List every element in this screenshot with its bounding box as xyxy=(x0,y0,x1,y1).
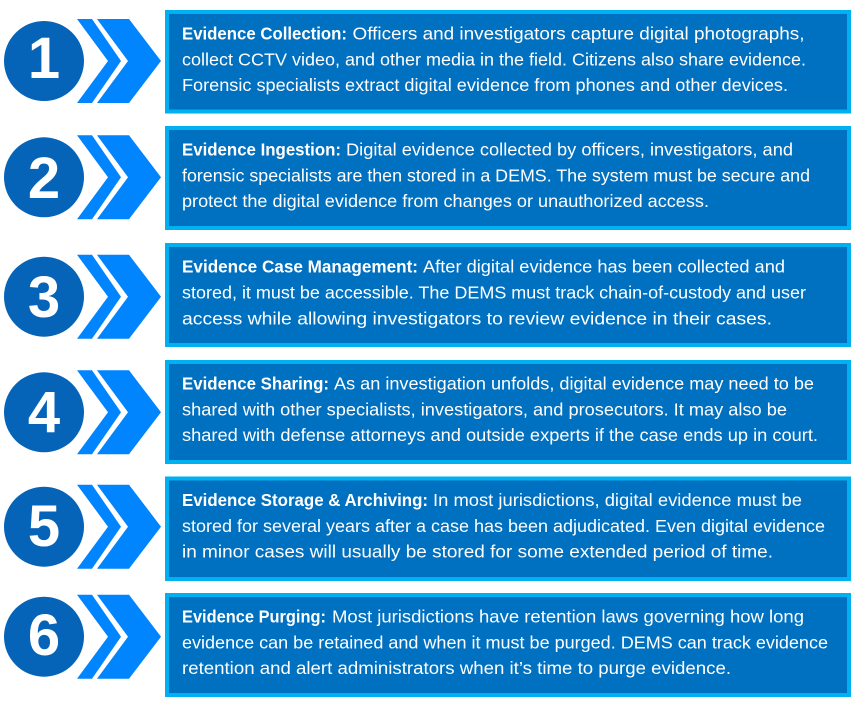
panel: evidence purging xyxy=(167,595,849,695)
number badge 6 xyxy=(4,597,84,677)
panel: evidence storage and archiving: in minor cases will usually be stored for some extended period of time. xyxy=(182,542,773,562)
chevron arrow 1 xyxy=(77,19,161,103)
number badge 2 xyxy=(4,137,84,217)
panel: evidence sharing: shared with other specialists, investigators, and prosecutors. It may also be xyxy=(182,399,787,419)
panel: evidence sharing: shared with defense attorneys and outside experts if the case ends up in court. xyxy=(182,425,818,445)
panel: evidence collection: Evidence Collection: xyxy=(182,23,347,43)
panel: evidence case management: access while allowing investigators to review evidence in their cases. xyxy=(182,308,772,328)
number badge 3: 3 xyxy=(28,265,60,330)
panel: evidence collection xyxy=(167,12,849,112)
step 1 row xyxy=(4,12,849,112)
step 4 row xyxy=(4,362,849,462)
panel: evidence storage and archiving: Evidence Storage & Archiving: xyxy=(182,490,428,510)
panel: evidence purging: evidence can be retained and when it must be purged. DEMS can track evidence xyxy=(182,632,828,652)
chevron arrow 4 xyxy=(77,370,161,454)
chevron arrow 2 xyxy=(77,135,161,219)
panel: evidence case management xyxy=(167,245,849,345)
panel: evidence case management: After digital evidence has been collected and xyxy=(423,256,785,276)
panel: evidence ingestion: Digital evidence collected by officers, investigators, and xyxy=(346,139,793,159)
panel: evidence purging: retention and alert administrators when it’s time to purge evidence. xyxy=(182,658,731,678)
panel: evidence sharing: Evidence Sharing: xyxy=(182,373,329,393)
number badge 4: 4 xyxy=(28,380,60,445)
chevron arrow 3 xyxy=(77,255,161,339)
panel: evidence purging: Most jurisdictions have retention laws governing how long xyxy=(332,606,804,626)
panel: evidence ingestion: Evidence Ingestion: xyxy=(182,139,341,159)
number badge 2: 2 xyxy=(28,146,60,211)
number badge 4 xyxy=(4,372,84,452)
panel: evidence purging: Evidence Purging: xyxy=(182,606,326,626)
panel: evidence ingestion xyxy=(167,128,849,228)
panel: evidence collection: collect CCTV video, and other media in the field. Citizens also share evidence. xyxy=(182,49,806,69)
step 5 row xyxy=(4,478,849,579)
panel: evidence sharing xyxy=(167,362,849,462)
number badge 1: 1 xyxy=(28,26,60,91)
panel: evidence storage and archiving xyxy=(167,478,849,579)
panel: evidence collection: Officers and investigators capture digital photographs, xyxy=(352,23,804,43)
number badge 3 xyxy=(4,257,84,337)
chevron arrow 5 xyxy=(77,485,161,569)
panel: evidence sharing: As an investigation unfolds, digital evidence may need to be xyxy=(334,373,814,393)
panel: evidence case management: Evidence Case Management: xyxy=(182,256,418,276)
panel: evidence storage and archiving: stored for several years after a case has been adjudicated. Even digital evidence xyxy=(182,516,825,536)
panel: evidence storage and archiving: In most jurisdictions, digital evidence must be xyxy=(433,490,802,510)
panel: evidence case management: stored, it must be accessible. The DEMS must track chain-of-custody and user xyxy=(182,282,806,302)
panel: evidence ingestion: forensic specialists are then stored in a DEMS. The system must be secure and xyxy=(182,165,810,185)
number badge 1 xyxy=(4,21,84,101)
panel: evidence collection: Forensic specialists extract digital evidence from phones and other devices. xyxy=(182,75,788,95)
step 2 row xyxy=(4,128,849,228)
number badge 5: 5 xyxy=(28,494,60,559)
step 3 row xyxy=(4,245,849,345)
step 6 row xyxy=(4,595,849,695)
number badge 5 xyxy=(4,487,84,567)
panel: evidence ingestion: protect the digital evidence from changes or unauthorized access. xyxy=(182,191,709,211)
chevron arrow 6 xyxy=(77,595,161,679)
number badge 6: 6 xyxy=(28,603,60,668)
